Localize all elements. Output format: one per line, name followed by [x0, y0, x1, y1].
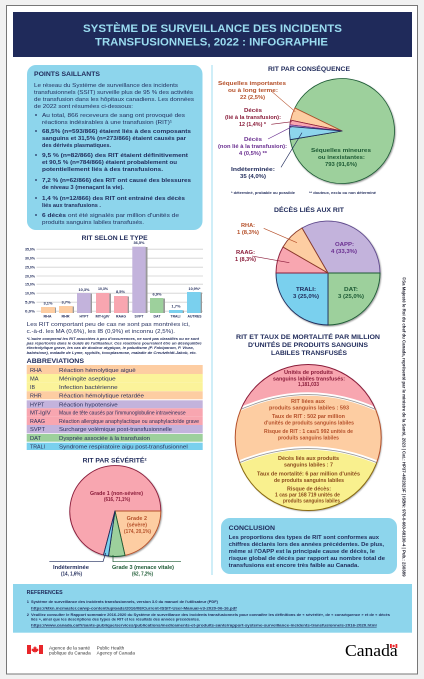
bar chart: RIT selon le type: TRALI — [170, 314, 180, 318]
table: abbreviations: Réaction hémolytique aiguë — [59, 368, 136, 374]
table: abbreviations: Dyspnée associée à la transfusion — [59, 436, 150, 442]
pie chart: RIT par conséquence: Séquelles mineures — [311, 148, 371, 154]
nested circle diagram: RIT et mortalité: produits sanguins labiles — [278, 436, 339, 442]
pie chart: RIT par conséquence — [218, 79, 394, 195]
panel: conclusion: même si l'OAPP est la principale cause de décès, le — [229, 549, 375, 555]
heading: RIT par conséquence: RIT PAR CONSÉQUENCE — [268, 64, 351, 73]
panel: points saillants: Le réseau du Système de surveillance des incidents — [34, 83, 178, 89]
pie chart: RIT par conséquence: Séquelles importantes — [218, 81, 286, 87]
table: abbreviations: Réaction hémolytique retardée — [59, 393, 144, 399]
nested circle diagram: RIT et mortalité: d'unités de produits sanguins labiles — [264, 420, 354, 426]
table: abbreviations: IB — [30, 385, 35, 391]
bar chart: RIT selon le type: 20,0% — [25, 274, 36, 278]
pie chart: RIT par sévérité: Indéterminée — [53, 565, 89, 571]
table: abbreviations: Maux de tête causés par l'immunoglobuline intraveineuse — [59, 410, 186, 416]
pie chart: décès liés aux RIT — [235, 221, 380, 325]
pie chart: RIT par sévérité: (sévère) — [127, 522, 147, 528]
panel: conclusion: CONCLUSION — [229, 525, 275, 532]
panel: points saillants — [27, 65, 202, 230]
bar chart: RIT selon le type: 10,3% — [78, 288, 90, 292]
table: abbreviations: RHR — [30, 393, 42, 399]
pie chart: RIT par conséquence: 12 (1,4%) * — [239, 122, 267, 128]
bar chart: RIT selon le type: 10,3% — [98, 287, 109, 291]
bar chart: RIT selon le type: AUTRES — [188, 314, 202, 318]
pie chart: RIT par conséquence: Indéterminée: — [231, 167, 275, 173]
panel: conclusion: chiffres déclarés lors des années précédentes. De plus, — [229, 542, 384, 548]
bar chart: RIT selon le type: 36,5% — [134, 241, 145, 245]
panel: points saillants: sanguins et 31,5% (n=273/866) étaient causés par — [42, 136, 187, 142]
pie chart: RIT par conséquence: * déterminé, probable ou possible — [231, 191, 295, 195]
pie chart: décès liés aux RIT: 3 (25,0%) — [293, 294, 319, 300]
table: abbreviations: Surcharge volémique post-transfusionnelle — [59, 427, 172, 433]
pie chart: RIT par sévérité: (616, 71,1%) — [104, 497, 130, 503]
panel: points saillants: liés aux transfusions . — [42, 203, 101, 209]
nested circle diagram: RIT et mortalité: sanguins labiles : 7 — [284, 462, 333, 468]
pie chart: RIT par conséquence: ou à long terme: — [228, 88, 278, 94]
logo: Government of Canada signature — [27, 645, 135, 656]
bar chart: RIT selon le type: 1,7% — [172, 304, 181, 308]
footnote: autres: électrolytique grave, les cas de douleur atypique, le paludisme (P. Falciparum, P. Vivax, — [27, 346, 194, 350]
chart note: Les RIT comportant peu de cas ne sont pas montrées ici, — [27, 322, 191, 328]
pie chart: RIT par sévérité: Grade 2 — [127, 516, 147, 522]
panel: references: Veuillez consulter le Rapport sommaire 2016-2020 du Système de surveillance des incidents transfusionnels pour connaître les définitions de « sévérité», de « conséquence » et de « décès — [31, 612, 391, 617]
heading: RIT et taux de mortalité: D'UNITÉS DE PRODUITS SANGUINS — [248, 340, 369, 349]
panel: points saillants: produits sanguins labiles transfusés. — [42, 220, 144, 226]
pie chart: décès liés aux RIT: 1 (8,3%) — [237, 230, 259, 236]
bar chart: RIT selon le type — [25, 241, 203, 318]
chart note — [27, 322, 191, 335]
title banner: TRANSFUSIONNELS, 2022 : INFOGRAPHIE — [95, 36, 328, 48]
pie chart: RIT par conséquence: 4 (0,5%) ** — [239, 151, 268, 157]
bar chart: RIT selon le type: 6,9% — [152, 292, 162, 296]
pie chart: RIT par sévérité: Grade 3 (menace vitale) — [112, 565, 174, 571]
table: abbreviations: RHA — [30, 368, 42, 374]
panel: points saillants: 6 décès ont été signalés par million d'unités de — [42, 213, 179, 219]
bar chart: RIT selon le type: MT-IgIV — [96, 314, 110, 318]
pie chart: RIT par sévérité: (174, 20,1%) — [124, 529, 151, 535]
panel: points saillants: des dérivés plasmatiques. — [42, 143, 111, 149]
bar chart: RIT selon le type: 30,0% — [25, 257, 36, 261]
panel: references: liés », ainsi que les descriptions des types de RIT et les résultats des années précédentes. — [31, 616, 200, 622]
pie chart: décès liés aux RIT: TRALI: — [296, 287, 316, 293]
panel: references: https://www.canada.ca/fr/sante-publique/services/publications/medicaments-et-produits-sante/rapport-systeme-surveillance-incidents-transfusionnels-2016-2020.html — [31, 622, 377, 628]
pie chart: RIT par conséquence: Décès — [244, 108, 262, 114]
nested circle diagram: RIT et mortalité: Risque de RIT : 1 cas/1 992 unités de — [264, 429, 353, 435]
pie chart: décès liés aux RIT: 3 (25,0%) — [338, 294, 364, 300]
pie chart: RIT par sévérité: (14, 1,6%) — [61, 572, 82, 578]
bar chart: RIT selon le type: 8,5% — [116, 290, 126, 294]
heading: RIT et taux de mortalité: RIT ET TAUX DE MORTALITÉ PAR MILLION — [236, 332, 380, 341]
table: abbreviations: DAT — [30, 436, 42, 442]
pie chart: RIT par conséquence: 35 (4,0%) — [240, 174, 266, 180]
title banner — [13, 12, 412, 57]
table: abbreviations: MA — [30, 376, 39, 382]
footnote: autres: pas répertoriés dans le Guide de l'utilisateur. Ces réactions pourraient être un déséquilibre — [26, 342, 202, 346]
logo: Government of Canada signature: Public Health — [97, 646, 125, 650]
panel: points saillants: 9,5 % (n=82/866) des RIT étaient définitivement — [42, 153, 188, 159]
heading: RIT et taux de mortalité: LABILES TRANSFUSÉS — [271, 348, 348, 357]
pie chart: décès liés aux RIT: RAAG: — [236, 250, 255, 256]
pie chart: RIT par conséquence: (non lié à la transfusion): — [218, 144, 287, 150]
vertical copyright note: ©Sa Majesté le Roi du chef du Canada, représenté par le ministre de la Santé, 2023 | Cat.: HP37-46/2023F | ISBN: 978-0-660-68100-4 | Pub.: 230389 — [402, 277, 408, 577]
footnote: autres: *L'autre comprend les RIT associées à peu d'occurrences, ne sont pas classifiés ou ne sont — [27, 337, 200, 341]
bar chart: RIT selon le type: RHR — [62, 314, 70, 318]
nested circle diagram: RIT et mortalité: Taux de RIT : 502 par million — [272, 414, 345, 420]
nested circle diagram: RIT et mortalité: 1 cas par 168 719 unités de — [275, 492, 340, 498]
bar chart: RIT selon le type: 3,1% — [44, 302, 53, 306]
nested circle diagram: RIT et mortalité: sanguins labiles transfusés: — [273, 376, 345, 382]
bar chart: RIT selon le type: DAT — [154, 314, 161, 318]
heading: décès liés aux RIT: DÉCÈS LIÉS AUX RIT — [274, 205, 344, 214]
footnote: autres — [26, 337, 202, 355]
bar chart: RIT selon le type: 10,0% — [25, 292, 36, 296]
nested circle diagram: RIT et mortalité: 1,181,033 — [298, 382, 319, 388]
panel: points saillants: de niveau 3 (menaçant la vie). — [42, 185, 124, 191]
pie chart: RIT par conséquence: ** douteux, exclu ou non déterminé — [309, 191, 376, 195]
pie chart: RIT par sévérité: (62, 7,2%) — [132, 572, 153, 578]
footnote: autres: babésiose), maladie de Lyme, syphilis, toxoplasmose, maladie de Creutzfeldt-Jakob, etc. — [27, 351, 197, 355]
pie chart: RIT par conséquence: 22 (2,5%) — [240, 95, 265, 101]
panel: points saillants: 1,4 % (n=12/866) des RIT ont entrainé des décès — [42, 196, 185, 202]
bar chart: RIT selon le type: HYPT — [80, 314, 89, 318]
panel: points saillants: de 2022 sont résumées ci-dessous: — [34, 104, 133, 110]
pie chart: décès liés aux RIT: 4 (33,3%) — [331, 249, 357, 255]
logo: Government of Canada signature: Agence de la santé — [49, 646, 90, 650]
panel: points saillants: de transfusion dans les hôpitaux canadiens. Les données — [34, 97, 194, 103]
nested circle diagram: RIT et mortalité: Unités de produits — [284, 370, 333, 376]
pie chart: RIT par conséquence: Décès — [244, 137, 262, 143]
panel: points saillants: Au total, 866 receveurs de sang ont provoqué des — [42, 113, 185, 119]
panel: points saillants: réactions indésirables à une transfusion (RIT)¹ — [42, 120, 172, 126]
bar chart: RIT selon le type: RAAG — [116, 314, 126, 318]
table: abbreviations: HYPT — [30, 402, 45, 408]
table: abbreviations: MT-IgIV — [30, 410, 51, 416]
panel: conclusion: transfusions est encore très faible au Canada. — [229, 563, 359, 569]
pie chart: RIT par sévérité: Grade 1 (non-sévère) — [90, 491, 143, 497]
table: abbreviations: Réaction allergique anaphylactique ou anaphylactoïde grave — [59, 419, 199, 425]
bar chart: RIT selon le type: 10,9%* — [188, 287, 201, 291]
pie chart: RIT par conséquence: (lié à la transfusion): — [225, 115, 281, 121]
nested circle diagram: RIT et mortalité: produits sanguins labiles : 593 — [269, 406, 349, 412]
panel: conclusion: Les proportions des types de RIT sont conformes aux — [229, 535, 380, 541]
panel: points saillants: transfusionnels (SSIT) surveille plus de 95 % des activités — [34, 90, 193, 96]
panel: points saillants: potentiellement liés à des transfusions. — [42, 167, 164, 173]
pie chart: décès liés aux RIT: DAT: — [344, 287, 358, 293]
table: abbreviations: TRALI — [30, 444, 45, 450]
nested circle diagram: RIT et mortalité: Décès liés aux produits — [278, 456, 339, 462]
nested circle diagram: RIT et mortalité — [234, 364, 383, 512]
panel: points saillants: 68,5% (n=593/866) étaient liés à des composants — [42, 129, 191, 135]
table: abbreviations: RAAG — [30, 419, 45, 425]
table: abbreviations: Réaction hypotensive — [59, 402, 118, 408]
nested circle diagram: RIT et mortalité: de produits sanguins labiles — [274, 478, 344, 484]
panel: references: Système de surveillance des incidents transfusionnels, version 3.0 du manuel de l'utilisateur (PDF) — [31, 599, 219, 604]
pie chart: décès liés aux RIT: 1 (8,3%) — [235, 257, 256, 263]
bar chart: RIT selon le type: 15,0% — [25, 283, 36, 287]
panel: references: https://ktkn.mcmaster.ca/wp-content/uploads/2016/08/Current-ISSIT-User-Manual-v3-2020-06-16.pdf — [31, 606, 237, 610]
nested circle diagram: RIT et mortalité: Risque de décès: — [287, 486, 331, 492]
panel: points saillants: 7,2 % (n=62/866) des RIT ont causé des blessures — [42, 178, 191, 184]
panel: references — [13, 584, 412, 633]
chart note: c.-à-d. les MA (0,6%), les IB (0,9%) et inconnu (2,5%). — [27, 329, 175, 335]
bar chart: RIT selon le type: 3,7% — [62, 300, 71, 304]
logo: Government of Canada signature: Agency of Canada — [97, 650, 135, 656]
panel: references: 1 — [27, 599, 30, 604]
logo: Canada wordmark: Canada — [345, 641, 398, 660]
pie chart: décès liés aux RIT: RHA: — [241, 223, 255, 229]
table: abbreviations: Infection bactérienne — [59, 385, 118, 391]
table: abbreviations: Méningite aseptique — [59, 376, 116, 382]
logo: Government of Canada signature: publique du Canada — [49, 650, 91, 656]
nested circle diagram: RIT et mortalité: produits sanguins labiles — [283, 498, 340, 504]
nested circle diagram: RIT et mortalité: RIT liées aux — [291, 399, 325, 405]
panel: references: 2 — [27, 612, 30, 617]
nested circle diagram: RIT et mortalité: Taux de mortalité: 6 par million d'unités — [257, 472, 360, 478]
heading: RIT par sévérité: RIT PAR SÉVÉRITÉ² — [83, 456, 147, 464]
panel: points saillants: POINTS SAILLANTS — [34, 71, 101, 78]
table: abbreviations: SVPT — [30, 427, 46, 433]
heading: RIT selon le type: RIT SELON LE TYPE — [82, 235, 148, 242]
title banner: SYSTÈME DE SURVEILLANCE DES INCIDENTS — [83, 22, 342, 35]
bar chart: RIT selon le type: 35,0% — [25, 248, 36, 252]
bar chart: RIT selon le type: 5,0% — [25, 301, 36, 305]
heading: abbreviations: ABBREVIATIONS — [27, 358, 85, 365]
bar chart: RIT selon le type: RHA — [44, 314, 52, 318]
table: abbreviations — [27, 365, 203, 450]
bar chart: RIT selon le type: 25,0% — [25, 266, 36, 270]
heading: RIT et taux de mortalité — [236, 332, 380, 357]
pie chart: RIT par sévérité — [49, 466, 181, 578]
panel: points saillants: et 90,5 % (n=784/866) étaient probablement ou — [42, 160, 178, 166]
table: abbreviations: Syndrome respiratoire aigu post-transfusionnel — [59, 444, 188, 450]
panel: references: REFERENCES — [27, 590, 63, 596]
pie chart: RIT par conséquence: ou inexistantes: — [318, 155, 365, 161]
panel: conclusion — [221, 518, 397, 574]
pie chart: décès liés aux RIT: OAPP: — [335, 242, 354, 248]
pie chart: RIT par conséquence: 793 (91,6%) — [325, 162, 357, 168]
bar chart: RIT selon le type: SVPT — [134, 314, 144, 318]
panel: conclusion: risque global de décès par rapport au nombre total de — [229, 556, 385, 562]
bar chart: RIT selon le type: 0,0% — [25, 310, 36, 314]
